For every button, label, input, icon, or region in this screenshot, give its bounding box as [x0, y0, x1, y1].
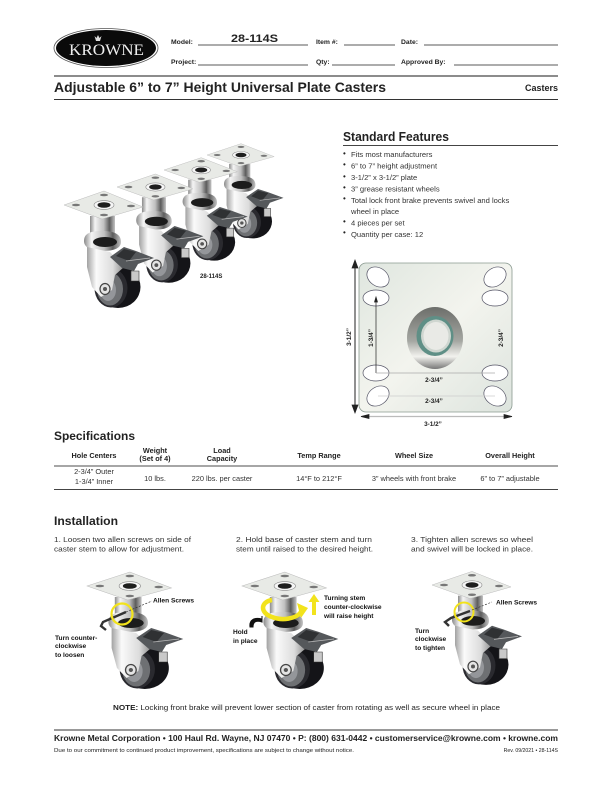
caster photo — [242, 572, 338, 689]
allen key — [101, 612, 126, 630]
specifications table: 1-3/4” Inner — [75, 477, 114, 486]
feature list: Quantity per case: 12 — [351, 230, 423, 239]
form fields: Project: — [171, 59, 196, 66]
feature list: 4 pieces per set — [351, 218, 405, 228]
label: turning stem: counter-clockwise — [324, 604, 382, 611]
allen key — [445, 611, 470, 626]
step 2 text — [236, 535, 373, 554]
specifications table: 2-3/4” Outer — [74, 467, 114, 476]
step 2 text: 2. Hold base of caster stem and turn — [236, 535, 372, 544]
dimension labels: 3-1/2” — [346, 328, 353, 346]
caster photo — [432, 571, 522, 685]
heading: installation: Installation — [54, 514, 118, 528]
step 1 text — [54, 535, 192, 554]
form fields: Item #: — [316, 39, 338, 46]
feature list: • — [343, 194, 346, 203]
label: turning stem: Turning stem — [324, 595, 365, 602]
panel: step 2 — [233, 535, 382, 689]
footer revision: Rev. 09/2021 • 28-114S — [504, 748, 559, 754]
form fields: 28-114S — [231, 33, 278, 45]
yellow up arrow — [308, 594, 320, 615]
specifications table: Capacity — [207, 454, 238, 463]
label: turn clockwise: Turn — [415, 628, 429, 635]
feature list: • — [343, 217, 346, 226]
center boss — [407, 307, 463, 369]
yellow circle — [112, 604, 132, 624]
title: Adjustable 6” to 7” Height Universal Plate Casters — [54, 80, 386, 95]
form fields: Approved By: — [401, 59, 446, 66]
feature list: • — [343, 172, 346, 181]
feature list: • — [343, 183, 346, 192]
step 3 text: and swivel will be locked in place. — [411, 544, 533, 554]
step 3 text: 3. Tighten allen screws so wheel — [411, 535, 533, 544]
specifications table: Hole Centers — [71, 451, 117, 460]
caster photo — [87, 572, 183, 689]
label: turn counter-clockwise: Turn counter- — [55, 635, 97, 642]
label: turning stem — [323, 595, 382, 620]
panel: standard features — [343, 129, 558, 239]
logo: Krowne — [54, 28, 158, 68]
label: turn counter-clockwise: clockwise — [55, 643, 86, 650]
feature list — [343, 149, 509, 239]
feature list: • — [343, 149, 346, 158]
product photo: four casters — [64, 144, 284, 308]
step 3 text — [411, 535, 533, 554]
logo: Krowne: KROWNE — [69, 42, 144, 59]
feature list: wheel in place — [350, 207, 399, 216]
label: turn clockwise — [415, 628, 446, 652]
feature list: 6” to 7” height adjustment — [351, 162, 438, 170]
pointer — [472, 602, 492, 610]
label: turn clockwise: to tighten — [415, 645, 445, 652]
dimension labels: 2-3/4” — [425, 377, 443, 384]
panel: step 1 — [54, 535, 194, 689]
black hold arrow — [250, 616, 262, 627]
specifications table: Temp Range — [297, 451, 341, 460]
footer disclaimer: Due to our commitment to continued product improvement, specifications are subject to change without notice. — [54, 748, 354, 754]
label: hold in place — [233, 629, 258, 645]
heading: specifications: Specifications — [54, 429, 135, 443]
feature list: • — [343, 160, 346, 169]
label: allen screws: Allen Screws — [153, 598, 194, 604]
plate — [359, 263, 512, 412]
feature list: Fits most manufacturers — [351, 150, 433, 159]
label: turning stem: will raise height — [323, 613, 374, 620]
feature list: Total lock front brake prevents swivel and locks — [351, 196, 509, 205]
dimension labels: 3-1/2” — [424, 421, 442, 428]
specifications table: 6” to 7” adjustable — [480, 474, 540, 483]
step 1 text: caster stem to allow for adjustment. — [54, 544, 184, 554]
yellow rotation arrow — [263, 600, 308, 619]
specifications table: 220 lbs. per caster — [192, 474, 253, 483]
specifications table: Weight — [143, 446, 168, 455]
feature list: 3-1/2” x 3-1/2” plate — [351, 173, 417, 182]
step 2 text: stem until raised to the desired height. — [236, 544, 373, 554]
specifications table: 10 lbs. — [144, 474, 166, 483]
specifications table: Wheel Size — [395, 451, 433, 460]
label: turn counter-clockwise: to loosen — [55, 652, 84, 659]
dimension labels: 2-3/4” — [425, 398, 443, 405]
photo caption: 28-114S — [200, 274, 222, 280]
footer contact line: Krowne Metal Corporation • 100 Haul Rd. Wayne, NJ 07470 • P: (800) 631-0442 • customerservice@krowne.com • krowne.com — [54, 734, 558, 743]
feature list: • — [343, 228, 346, 237]
dimension labels: 1-3/4” — [368, 329, 375, 347]
pointer — [126, 601, 152, 612]
feature list: 3” grease resistant wheels — [351, 184, 440, 194]
specifications table: Load — [213, 446, 231, 455]
label: hold in place: in place — [233, 638, 258, 645]
form fields — [171, 33, 558, 66]
specifications table: 3” wheels with front brake — [372, 474, 456, 483]
dimension lines — [352, 260, 512, 418]
note: NOTE: Locking front brake will prevent lower section of caster from rotating as well as secure wheel in place — [113, 703, 500, 712]
label: allen screws: Allen Screws — [496, 600, 537, 606]
form fields: Date: — [401, 39, 418, 46]
label: turn clockwise: clockwise — [415, 636, 446, 643]
heading: standard features: Standard Features — [343, 129, 449, 144]
label: turn counter-clockwise — [55, 635, 97, 659]
specifications table: Overall Height — [485, 451, 535, 460]
form fields: Qty: — [316, 59, 330, 66]
dimension labels: 2-3/4” — [498, 329, 505, 347]
panel: step 3 — [411, 535, 537, 685]
specifications table: 14°F to 212°F — [296, 474, 342, 483]
specifications table — [54, 446, 558, 490]
slots — [363, 263, 510, 410]
label: hold in place: Hold — [233, 629, 248, 636]
form fields: Model: — [171, 39, 193, 46]
dimension labels — [346, 328, 505, 428]
specifications table: (Set of 4) — [139, 454, 171, 463]
step 1 text: 1. Loosen two allen screws on side of — [54, 535, 192, 544]
plate dimension diagram — [346, 260, 512, 428]
yellow circle — [454, 602, 474, 622]
category label: Casters — [525, 83, 558, 93]
